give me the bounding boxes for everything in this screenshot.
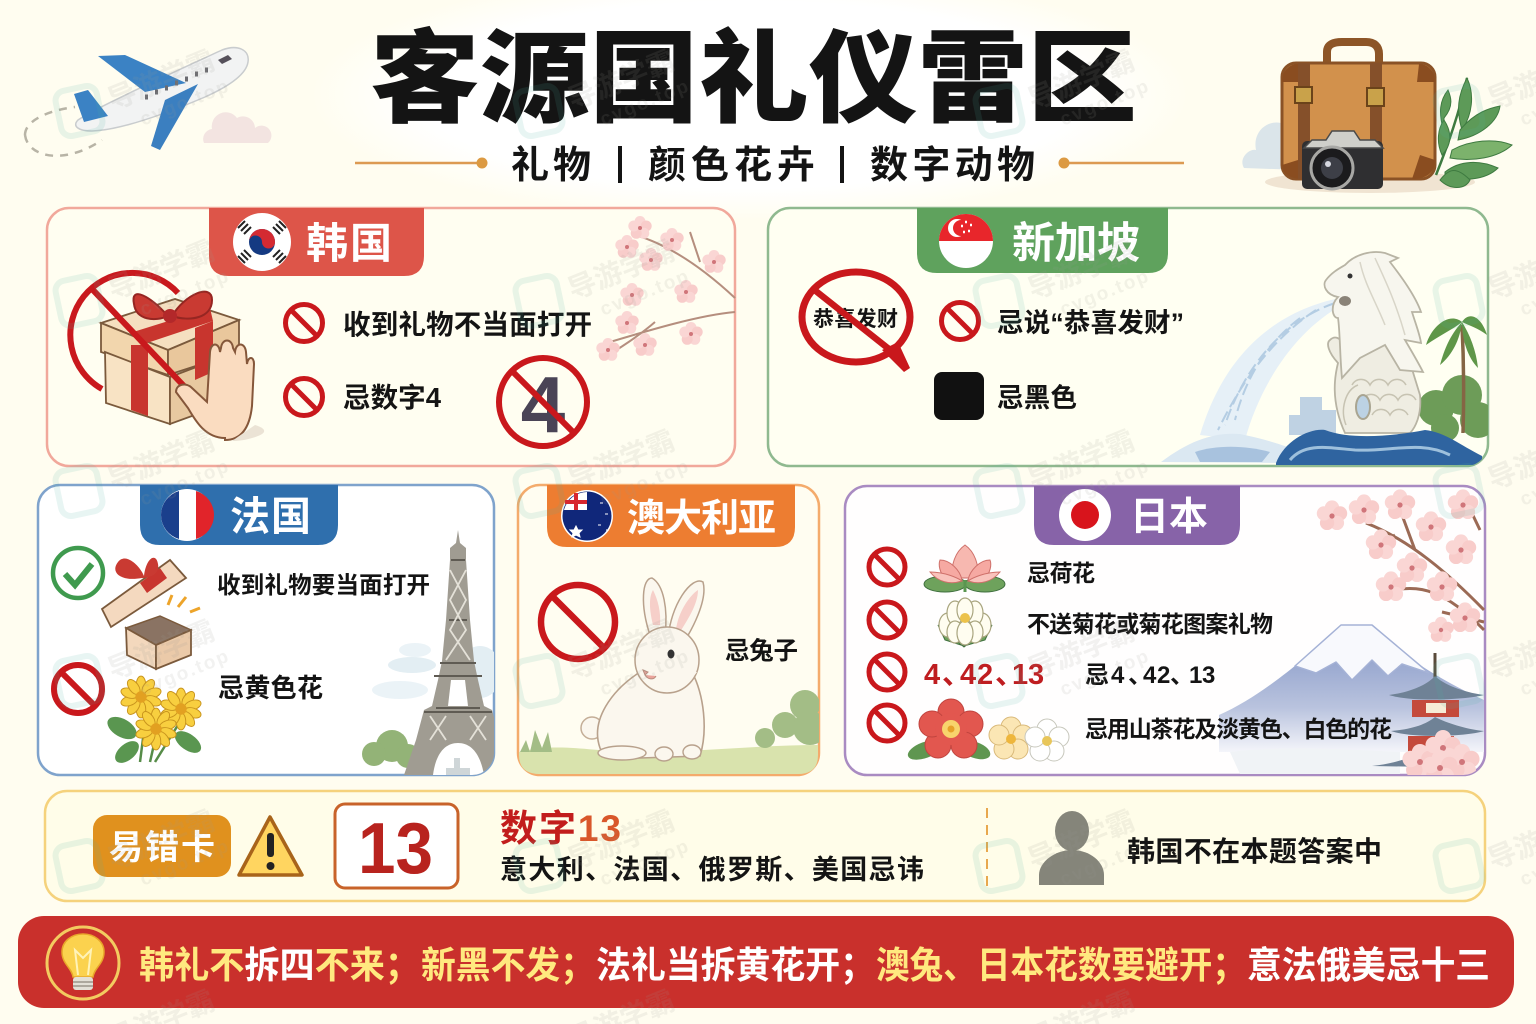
illustration: rabbit (581, 578, 704, 761)
panel: Japan (845, 486, 1485, 784)
country tab: Korea (209, 208, 424, 276)
mnemonic: France: 法礼当拆黄花开； (596, 945, 875, 986)
mnemonic: Australia and Japan: 澳兔、日本花数要避开； (876, 945, 1246, 986)
watermarks: 导游学霸 (1024, 615, 1139, 686)
icon: prohibition (942, 302, 978, 340)
text: avoid yellow flowers: 忌黄色花 (218, 673, 323, 703)
icon: blossom branch (596, 216, 735, 361)
text: avoid numbers: 忌4、42、13 (1085, 662, 1215, 689)
number box: 13 (335, 804, 458, 889)
watermarks: cvgo.top (137, 265, 233, 321)
country tab: Singapore (917, 208, 1168, 273)
watermarks: 导游学霸 (564, 425, 679, 496)
watermarks: cvgo.top (137, 835, 233, 891)
icon: no number 4 (499, 358, 587, 449)
number box: 13: 13 (358, 809, 433, 889)
mnemonic: thirteen: 意法俄美忌十三 (1247, 945, 1490, 986)
watermarks: 导游学霸 (564, 615, 679, 686)
watermarks: cvgo.top (597, 835, 693, 891)
country tab: France (140, 485, 338, 545)
text: countries: 意大利、法国、俄罗斯、美国忌讳 (500, 855, 924, 885)
icon: prohibition (54, 665, 102, 713)
icon: no speech (802, 272, 910, 372)
country tab: Singapore: 新加坡 (1012, 220, 1140, 268)
watermarks: cvgo.top (137, 455, 233, 511)
text: avoid camellia: 忌用山茶花及淡黄色、白色的花 (1085, 716, 1392, 742)
panel: Singapore (768, 208, 1496, 466)
watermarks: cvgo.top (1057, 645, 1153, 701)
text: no chrysanthemum: 不送菊花或菊花图案礼物 (1027, 611, 1273, 637)
illustration: grass (519, 745, 818, 774)
watermarks: cvgo.top (1057, 75, 1153, 131)
watermarks: cvgo.top (137, 75, 233, 131)
watermarks: cvgo.top (597, 75, 693, 131)
icon: lotus (924, 545, 1005, 592)
watermarks: 导游学霸 (104, 805, 219, 876)
icon: prohibition (869, 602, 905, 638)
watermarks: cvgo.top (1057, 835, 1153, 891)
illustration: blossom branch (1317, 489, 1484, 642)
icon: prohibition (869, 654, 905, 690)
divider dashed (986, 808, 988, 888)
panel: Australia (518, 485, 827, 775)
watermarks: 导游学霸 (104, 45, 219, 116)
watermarks: 导游学霸 (1024, 45, 1139, 116)
icon: no number 4: 4 (521, 360, 566, 449)
header glow (310, 0, 1190, 220)
watermarks: 导游学霸 (564, 235, 679, 306)
watermarks: 导游学霸 (1024, 425, 1139, 496)
watermarks: cvgo.top (137, 645, 233, 701)
text: avoid rabbit: 忌兔子 (725, 637, 798, 665)
watermarks: 导游学霸 (104, 235, 219, 306)
icon: warning (239, 817, 302, 875)
subtitle: 颜色花卉 (648, 145, 815, 187)
text: avoid black: 忌黑色 (997, 383, 1077, 413)
watermarks: cvgo.top (1057, 455, 1153, 511)
text: avoid 4: 忌数字4 (343, 382, 442, 413)
title: 客源国礼仪雷区 (370, 24, 1137, 136)
illustration: Mount Fuji (1219, 625, 1484, 774)
banner: mnemonic (18, 916, 1514, 1008)
panel: common mistake card (45, 791, 1485, 901)
country tab: France: 法国 (230, 495, 311, 539)
icon: chrysanthemum (938, 598, 992, 647)
watermarks: cvgo.top (597, 265, 693, 321)
icon: suitcase and camera (1242, 42, 1512, 193)
illustration: Eiffel tower (362, 530, 494, 775)
numbers: red: 4、42、13 (924, 659, 1044, 691)
watermarks: cvgo.top (1057, 265, 1153, 321)
watermarks: 导游学霸 (104, 425, 219, 496)
icon: prohibition (869, 705, 905, 741)
mnemonic: Korea: 韩礼不拆四不来； (139, 945, 420, 986)
watermarks: 导游学霸 (1024, 235, 1139, 306)
watermarks: 导游学霸 (104, 615, 219, 686)
subtitle: 礼物 (511, 145, 591, 187)
panel: Korea (47, 208, 735, 466)
panel: France (38, 485, 512, 775)
subtitle: 数字动物 (870, 145, 1035, 187)
mnemonic: Singapore: 新黑不发； (421, 945, 595, 986)
icon: open gift (102, 558, 200, 669)
illustration: lower blossoms (1402, 730, 1480, 775)
country tab: Japan: 日本 (1130, 496, 1208, 539)
watermarks: 导游学霸 (1024, 805, 1139, 876)
watermarks: cvgo.top (597, 645, 693, 701)
icon: camellia and pale flowers (905, 699, 1069, 764)
illustration: Merlion (1161, 252, 1496, 465)
icon: light bulb (47, 927, 119, 999)
illustration: pagoda (1372, 653, 1484, 767)
watermarks: cvgo.top (597, 455, 693, 511)
watermarks: 导游学霸 (564, 45, 679, 116)
badge: mistake card (93, 815, 231, 877)
icon: yellow flowers (104, 676, 205, 767)
icon: airplane (25, 48, 271, 156)
icon: prohibition (541, 585, 615, 659)
icon: prohibition (286, 304, 322, 342)
watermarks: 导游学霸 (564, 805, 679, 876)
text: must open: 收到礼物要当面打开 (217, 572, 430, 598)
icon: prohibition (286, 378, 322, 416)
text: do not open: 收到礼物不当面打开 (343, 309, 592, 340)
text: number 13 heading: 数字13 (500, 808, 621, 849)
subtitle (355, 145, 1184, 187)
country tab: Korea: 韩国 (306, 220, 392, 267)
icon: no speech: 恭喜发财 (813, 308, 898, 331)
swatch: black (934, 372, 984, 420)
country tab: Japan (1034, 486, 1240, 545)
icon: person (1039, 811, 1104, 885)
icon: no gift (70, 273, 264, 441)
icon: prohibition (869, 549, 905, 585)
icon: check (53, 548, 103, 598)
illustration: shrubs (520, 690, 827, 752)
text: Korea not in answer: 韩国不在本题答案中 (1127, 836, 1382, 867)
country tab: Australia: 澳大利亚 (627, 498, 776, 540)
country tab: Australia (547, 485, 795, 547)
text: do not say: 忌说“恭喜发财” (997, 308, 1184, 338)
text: avoid lotus: 忌荷花 (1027, 560, 1095, 586)
badge: mistake card: 易错卡 (109, 829, 215, 867)
